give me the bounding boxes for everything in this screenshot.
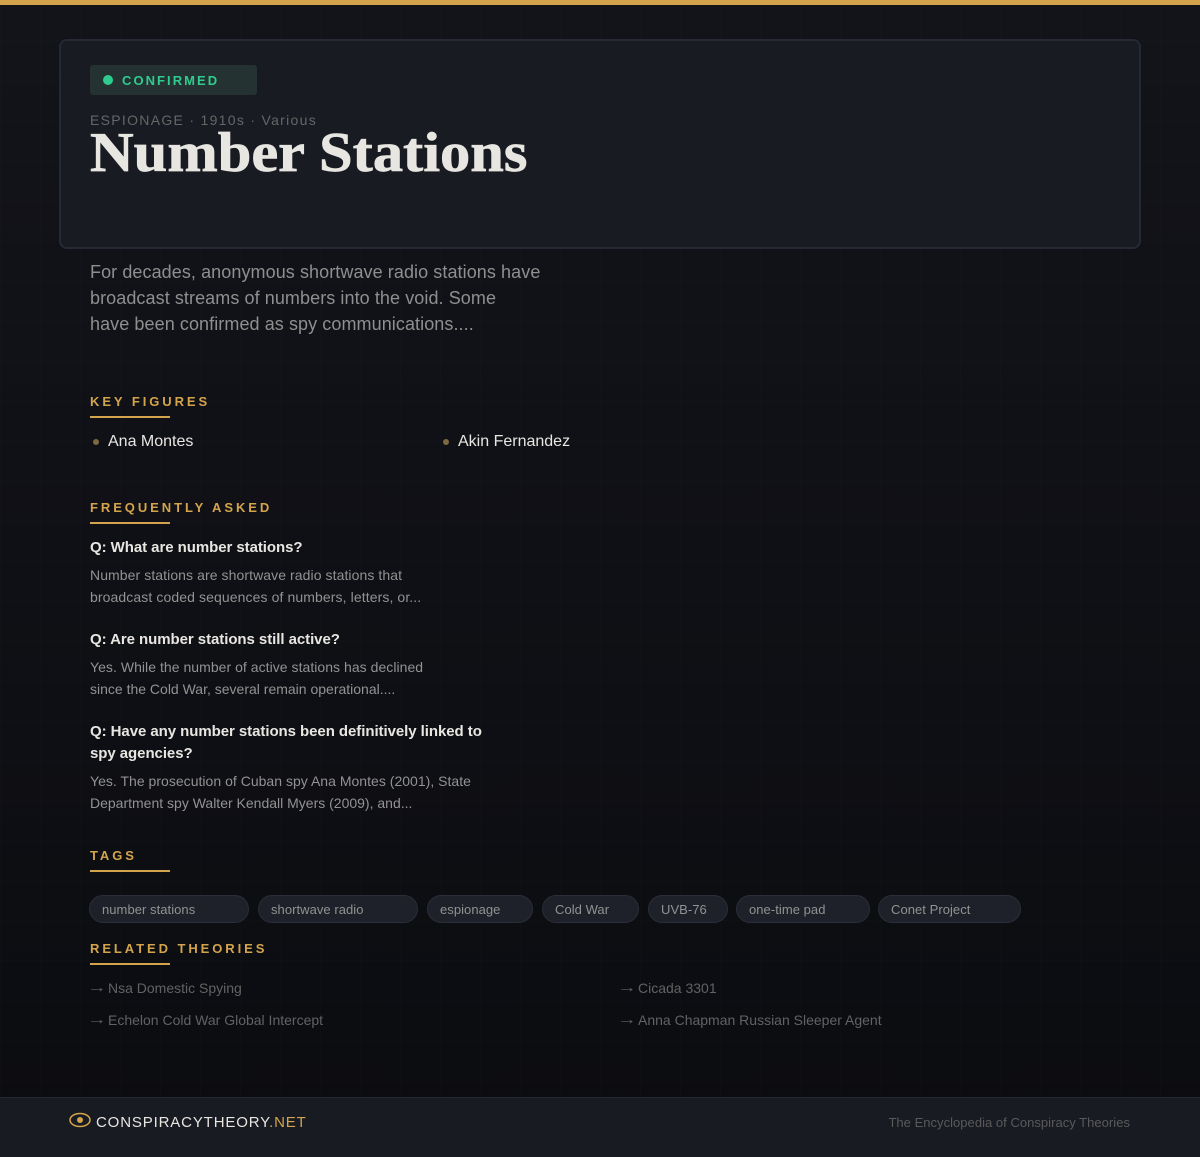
- intro text: [90, 262, 540, 334]
- related link: Cicada: →: [617, 979, 637, 995]
- panel: header card: [59, 39, 1141, 249]
- heading: related theories: RELATED THEORIES: [90, 941, 267, 956]
- faq answer 1: broadcast coded sequences of numbers, letters, or...: [90, 589, 421, 605]
- related link: Cicada: Cicada 3301: [638, 980, 717, 996]
- key figure: Ana Montes: Ana Montes: [108, 433, 193, 450]
- logo wordmark: CONSPIRACYTHEORY.NET: [96, 1114, 307, 1131]
- related link: Echelon: →: [87, 1011, 107, 1027]
- faq answer 3: Department spy Walter Kendall Myers (2009), and...: [90, 795, 412, 811]
- tag list: UVB-76: [661, 902, 707, 917]
- intro text: For decades, anonymous shortwave radio stations have: [90, 262, 540, 282]
- tag list: Cold War: [555, 902, 609, 917]
- faq answer 2: Yes. While the number of active stations has declined: [90, 659, 423, 675]
- heading: tags: TAGS: [90, 848, 137, 863]
- faq question 1: Q: What are number stations?: [90, 539, 303, 556]
- faq answer 2: [90, 659, 423, 697]
- related link: Anna Chapman: Anna Chapman Russian Sleeper Agent: [638, 1012, 882, 1028]
- top accent bar: [0, 0, 1200, 5]
- tag list: espionage: [440, 902, 500, 917]
- tag list: one-time pad: [749, 902, 825, 917]
- badge dot: [103, 75, 113, 85]
- faq question 3: spy agencies?: [90, 745, 193, 762]
- faq question 3: [90, 723, 482, 762]
- tag list: [89, 895, 1021, 923]
- badge label: CONFIRMED: [122, 73, 219, 88]
- footer tagline: The Encyclopedia of Conspiracy Theories: [888, 1115, 1130, 1130]
- tag list: Conet Project: [891, 902, 970, 917]
- related link: NSA: →: [87, 979, 107, 995]
- related link: NSA: Nsa Domestic Spying: [108, 980, 242, 996]
- faq answer 2: since the Cold War, several remain operational....: [90, 681, 395, 697]
- faq answer 1: [90, 567, 421, 605]
- status badge: confirmed: [90, 65, 257, 95]
- heading: key figures: KEY FIGURES: [90, 394, 210, 409]
- heading: frequently asked: FREQUENTLY ASKED: [90, 500, 272, 515]
- footer: [0, 1097, 1200, 1157]
- faq answer 3: Yes. The prosecution of Cuban spy Ana Montes (2001), State: [90, 773, 471, 789]
- intro text: broadcast streams of numbers into the void. Some: [90, 288, 496, 308]
- faq question 2: Q: Are number stations still active?: [90, 631, 340, 648]
- intro text: have been confirmed as spy communications....: [90, 314, 474, 334]
- tag list: shortwave radio: [271, 902, 364, 917]
- related link: Echelon: Echelon Cold War Global Intercept: [108, 1012, 323, 1028]
- related link: Anna Chapman: →: [617, 1011, 637, 1027]
- faq answer 3: [90, 773, 471, 811]
- tag list: number stations: [102, 902, 195, 917]
- icon: eye logo: [69, 1112, 91, 1128]
- key figure: Akin Fernandez: Akin Fernandez: [458, 433, 570, 450]
- faq answer 1: Number stations are shortwave radio stations that: [90, 567, 402, 583]
- title: Number Stations: [90, 122, 527, 184]
- category meta line: ESPIONAGE · 1910s · Various: [90, 112, 317, 128]
- faq question 3: Q: Have any number stations been definitively linked to: [90, 723, 482, 740]
